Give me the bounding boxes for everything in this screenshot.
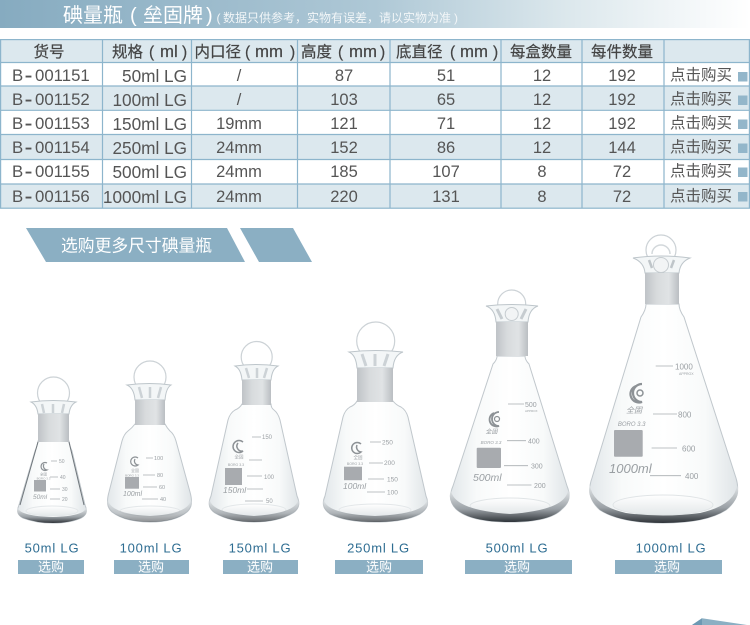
row B-001153: - <box>24 110 32 137</box>
table header row: 每件数量 <box>591 43 653 61</box>
row B-001154: 点击购买 <box>670 138 732 156</box>
table header row: mm <box>255 42 283 61</box>
flask 1000ml: 全固 <box>626 406 643 415</box>
flask 50ml: 40 <box>60 475 66 481</box>
flask 500ml: 500 <box>525 402 537 409</box>
row B-001156: 220 <box>330 188 358 206</box>
row B-001152: 点击购买 <box>670 90 732 108</box>
table header row: 内口径 <box>194 43 241 61</box>
row B-001155: 点击购买 <box>670 162 732 180</box>
title: ) <box>206 5 213 27</box>
row B-001153: 12 <box>533 115 551 133</box>
flask 50ml: 30 <box>62 487 68 493</box>
row B-001154: B <box>12 138 23 157</box>
table header row: 货号 <box>33 43 65 61</box>
flask 50ml: 50ml <box>33 494 48 501</box>
row B-001153: 001153 <box>35 114 90 133</box>
flask 150ml <box>209 342 299 522</box>
table header row: ( <box>338 44 344 61</box>
flask 150ml: 100 <box>264 475 275 481</box>
header band <box>0 0 750 28</box>
flask 50ml: 50 <box>59 459 65 465</box>
row B-001151: 点击购买 <box>670 66 732 84</box>
flask 100ml: 60 <box>159 485 165 491</box>
row B-001156: - <box>24 183 32 210</box>
row B-001154 <box>12 134 748 161</box>
50ml option: 50ml LG <box>25 540 79 556</box>
row B-001155: 107 <box>432 163 460 181</box>
table header row: 高度 <box>301 43 332 61</box>
50ml option <box>18 540 84 574</box>
flask 250ml: 150 <box>387 476 398 484</box>
row B-001156: 72 <box>613 188 631 206</box>
flask 500ml: APPROX <box>525 409 538 413</box>
flask 150ml: 全固 <box>234 454 244 460</box>
row B-001156 <box>12 183 748 210</box>
flask 150ml: 50 <box>266 499 273 505</box>
row B-001152: 65 <box>437 91 455 109</box>
flask 250ml: 200 <box>384 460 395 467</box>
flask 150ml: 150 <box>262 435 273 441</box>
flask 50ml <box>17 377 87 523</box>
row B-001151 <box>12 62 748 89</box>
flask 100ml: 100 <box>154 456 163 462</box>
row B-001153: 150ml LG <box>112 114 187 134</box>
1000ml option: 1000ml LG <box>636 540 706 556</box>
banner text: 选购更多尺寸碘量瓶 <box>61 236 212 256</box>
150ml option: 150ml LG <box>229 540 291 556</box>
row B-001151: 192 <box>608 67 636 85</box>
row B-001151: / <box>237 67 242 85</box>
flask 100ml: 100ml <box>123 491 143 498</box>
table header row <box>33 42 653 61</box>
row B-001152: 103 <box>330 91 358 109</box>
row B-001155: B <box>12 162 23 181</box>
row B-001154: 001154 <box>35 138 90 157</box>
shaded rows <box>0 40 750 208</box>
flask 100ml: 40 <box>160 497 166 503</box>
50ml option: 选购 <box>38 560 64 574</box>
title: 垒固牌 <box>143 4 203 27</box>
row B-001156: 1000ml LG <box>103 187 187 207</box>
table header row: ) <box>290 44 295 61</box>
flask 250ml <box>323 322 428 522</box>
row B-001155: 185 <box>330 163 358 181</box>
row B-001156: 001156 <box>35 187 90 206</box>
row B-001152: - <box>24 86 32 113</box>
row B-001153 <box>12 110 748 137</box>
row B-001154: 86 <box>437 139 455 157</box>
flask 50ml: 全固 <box>40 472 47 476</box>
title note: ) <box>454 11 458 25</box>
table header row: ) <box>380 44 385 61</box>
row B-001155: 500ml LG <box>112 162 187 182</box>
row B-001155: 72 <box>613 163 631 181</box>
flask 250ml: 100ml <box>343 481 367 491</box>
row B-001155: - <box>24 158 32 185</box>
title: ( <box>130 5 137 27</box>
flask 1000ml: 800 <box>678 410 692 420</box>
row B-001152: B <box>12 90 23 109</box>
flask 500ml: 200 <box>534 483 546 490</box>
table header row: mm <box>460 42 488 61</box>
flask 1000ml: BORO 3.3 <box>618 422 646 428</box>
row B-001153: 19mm <box>216 115 262 133</box>
1000ml option: 选购 <box>654 560 680 574</box>
title note: ( <box>216 11 220 25</box>
row B-001154: - <box>24 134 32 161</box>
flask 1000ml: 1000ml <box>609 461 653 476</box>
flask 50ml: 20 <box>62 497 68 503</box>
500ml option <box>465 540 572 574</box>
specification table <box>0 40 750 210</box>
row B-001154: 152 <box>330 139 358 157</box>
row B-001153: 71 <box>437 115 455 133</box>
flask 250ml: 250 <box>382 440 393 446</box>
row B-001154: 144 <box>608 139 636 157</box>
100ml option <box>114 540 189 574</box>
row B-001155 <box>12 158 748 185</box>
row B-001151: 001151 <box>35 66 90 85</box>
250ml option <box>335 540 423 574</box>
1000ml option <box>615 540 722 574</box>
150ml option <box>223 540 298 574</box>
table header row: ml <box>160 42 178 61</box>
flask 1000ml: 400 <box>685 472 699 481</box>
flask 100ml <box>107 361 192 522</box>
row B-001151: 12 <box>533 67 551 85</box>
flask 500ml: 400 <box>528 438 540 446</box>
row B-001156: 24mm <box>216 188 262 206</box>
row B-001151: - <box>24 62 32 89</box>
table header row: ) <box>182 44 187 61</box>
row B-001151: 87 <box>335 67 353 85</box>
row B-001156: 点击购买 <box>670 187 732 205</box>
row B-001152: 192 <box>608 91 636 109</box>
table header row: ( <box>149 44 155 61</box>
flask 250ml: BORO 3.3 <box>347 462 363 466</box>
flask 100ml: 80 <box>157 473 163 479</box>
flask 50ml: BORO 3.3 <box>37 476 51 480</box>
table header row: ( <box>245 44 251 61</box>
title note: 数据只供参考，实物有误差，请以实物为准 <box>223 10 451 25</box>
row B-001155: 24mm <box>216 163 262 181</box>
250ml option: 选购 <box>366 560 392 574</box>
row B-001156: 8 <box>537 188 547 206</box>
row B-001152: 001152 <box>35 90 90 109</box>
flask 100ml: BORO 3.3 <box>125 474 139 478</box>
flask 500ml: 全固 <box>485 428 498 436</box>
100ml option: 100ml LG <box>120 540 182 556</box>
flask 1000ml: 1000 <box>675 362 693 372</box>
table header row: mm <box>349 42 377 61</box>
row B-001155: 001155 <box>35 162 90 181</box>
table header row: 规格 <box>112 43 144 61</box>
150ml option: 选购 <box>247 560 273 574</box>
table header row: 底直径 <box>396 43 443 61</box>
row B-001152: / <box>237 91 242 109</box>
row B-001153: 121 <box>330 115 358 133</box>
flask 1000ml <box>589 235 738 523</box>
flask 500ml: 300 <box>531 464 543 470</box>
100ml option: 选购 <box>138 560 164 574</box>
flask 150ml: BORO 3.3 <box>228 463 244 467</box>
row B-001151: 50ml LG <box>122 66 187 86</box>
flask 250ml: 全固 <box>354 454 363 461</box>
row B-001156: B <box>12 187 23 206</box>
row B-001152 <box>12 86 748 113</box>
flask 500ml: BORO 3.3 <box>481 440 502 445</box>
500ml option: 500ml LG <box>486 540 548 556</box>
flask 150ml: 150ml <box>223 485 247 495</box>
row B-001153: B <box>12 114 23 133</box>
row B-001151: B <box>12 66 23 85</box>
row B-001153: 点击购买 <box>670 114 732 132</box>
row B-001154: 250ml LG <box>112 138 187 158</box>
table header row: ( <box>450 44 456 61</box>
product captions and buttons <box>18 540 722 574</box>
flask 500ml: 500ml <box>473 472 502 484</box>
flask 1000ml: APPROX <box>679 372 694 376</box>
row B-001151: 51 <box>437 67 455 85</box>
row B-001153: 192 <box>608 115 636 133</box>
corner ornament <box>692 618 747 625</box>
row B-001154: 24mm <box>216 139 262 157</box>
flask 1000ml: 600 <box>682 444 696 454</box>
row B-001154: 12 <box>533 139 551 157</box>
table header row: ) <box>493 44 498 61</box>
row B-001152: 100ml LG <box>112 90 187 110</box>
section banner <box>26 228 312 262</box>
title: 碘量瓶 <box>63 4 123 27</box>
flask 250ml: 100 <box>387 490 398 496</box>
250ml option: 250ml LG <box>347 540 410 556</box>
row B-001155: 8 <box>537 163 547 181</box>
500ml option: 选购 <box>504 560 530 574</box>
flask 500ml <box>450 290 570 522</box>
table header row: 每盒数量 <box>510 43 572 61</box>
row B-001152: 12 <box>533 91 551 109</box>
flask 100ml: 全固 <box>131 467 139 473</box>
row B-001156: 131 <box>432 188 460 206</box>
